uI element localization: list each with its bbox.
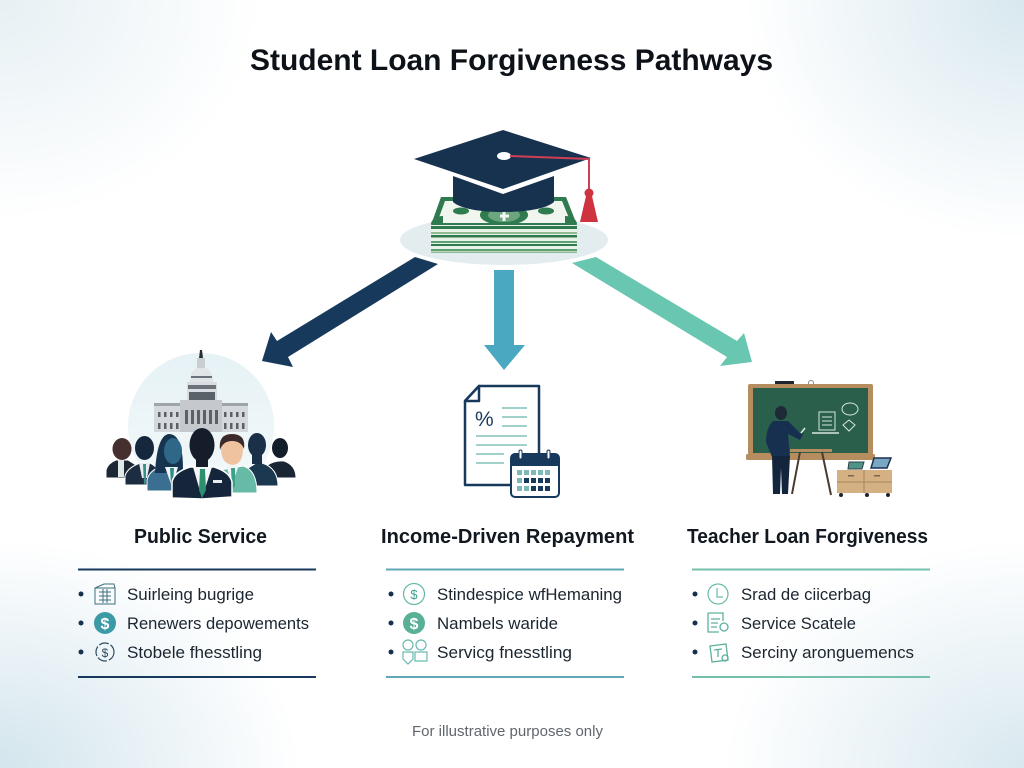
backdrop circle <box>128 353 274 499</box>
person 1 far left <box>106 438 136 478</box>
platform ellipse <box>400 215 608 265</box>
item 2: Renewers depowements <box>127 614 309 633</box>
person 6 <box>245 433 278 486</box>
person 7 far right <box>266 438 296 478</box>
arrow: to income-driven repayment <box>484 270 525 370</box>
illustration: public service <box>106 350 296 499</box>
cabinet with laptop <box>837 458 892 497</box>
person 5 peach <box>220 434 257 493</box>
document outline <box>465 386 539 485</box>
item 2 <box>388 612 558 634</box>
heading: Public Service <box>134 526 267 548</box>
item 2: $ <box>101 616 110 633</box>
item 3: $ <box>102 646 109 660</box>
person 2 <box>125 436 158 485</box>
percent sign: % <box>475 408 494 431</box>
panel: teacher loan forgiveness <box>687 526 930 678</box>
panel: income-driven repayment <box>381 526 634 678</box>
chalkboard <box>746 380 875 460</box>
cap button <box>497 152 511 160</box>
arrow: to public service <box>262 257 438 367</box>
illustration: income-driven repayment document <box>465 386 559 497</box>
item 2: Service Scatele <box>741 614 856 633</box>
person 3 woman <box>147 434 184 491</box>
item 3: Serciny aronguemencs <box>741 643 914 662</box>
item 1 <box>692 584 871 604</box>
icon: graduation cap on money stack <box>400 130 608 265</box>
cap board <box>414 130 591 189</box>
table <box>790 449 832 495</box>
cap base <box>453 176 554 212</box>
heading: Income-Driven Repayment <box>381 526 634 548</box>
item 1 <box>78 584 254 604</box>
heading: Teacher Loan Forgiveness <box>687 526 928 548</box>
tassel <box>510 156 598 222</box>
item 1: Stindespice wfHemaning <box>437 585 622 604</box>
item 1: Suirleing bugrige <box>127 585 254 604</box>
item 2: Nambels waride <box>437 614 558 633</box>
item 3 <box>388 640 572 664</box>
document lines <box>476 408 527 463</box>
item 2: $ <box>410 616 419 633</box>
panel: public service <box>78 526 316 678</box>
calendar <box>511 450 559 497</box>
page fold <box>465 386 479 401</box>
document <box>465 386 539 485</box>
item 2 <box>692 613 856 633</box>
teacher figure <box>766 406 805 494</box>
item 2 <box>78 612 309 634</box>
illustration: teacher at chalkboard <box>746 380 892 497</box>
capitol building <box>154 350 248 432</box>
item 3: Stobele fhesstling <box>127 643 262 662</box>
item 1: Srad de ciicerbag <box>741 585 871 604</box>
item 3: Servicg fnesstling <box>437 643 572 662</box>
footer note: For illustrative purposes only <box>412 723 603 740</box>
arrow: to teacher loan forgiveness <box>572 257 752 366</box>
title: Student Loan Forgiveness Pathways <box>250 44 773 77</box>
item 1: $ <box>410 587 418 602</box>
person 4 center man <box>172 428 232 499</box>
money stack <box>431 197 577 253</box>
